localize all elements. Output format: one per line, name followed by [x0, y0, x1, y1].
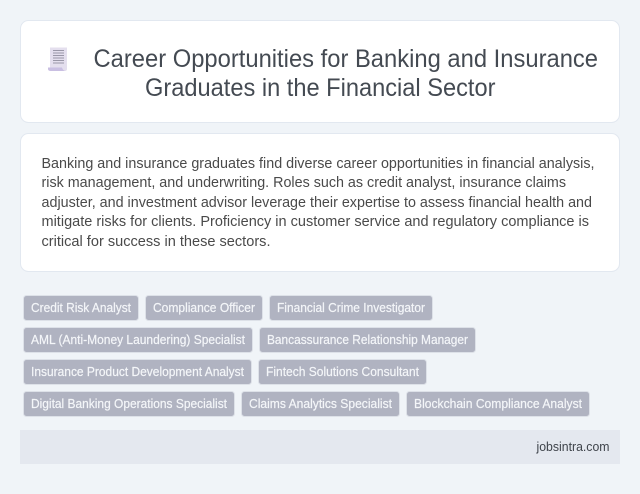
tag: Blockchain Compliance Analyst: Blockchain Compliance Analyst [414, 397, 583, 411]
footer site name: jobsintra.com [536, 440, 610, 454]
tag: Fintech Solutions Consultant: Fintech Solutions Consultant [266, 365, 420, 379]
footer [20, 430, 620, 464]
description line 5: critical for success in these sectors. [42, 234, 270, 250]
tag: Fintech Solutions Consultant [258, 360, 426, 384]
tag: Financial Crime Investigator: Financial Crime Investigator [277, 301, 425, 315]
title line 1: Career Opportunities for Banking and Insurance [94, 45, 598, 73]
tag: Digital Banking Operations Specialist: Digital Banking Operations Specialist [31, 397, 228, 411]
tag: Blockchain Compliance Analyst [406, 392, 590, 416]
tag: AML Specialist [24, 328, 252, 352]
description line 1: Banking and insurance graduates find diverse career opportunities in financial analysis, [42, 156, 594, 172]
tag: Financial Crime Investigator [270, 296, 432, 320]
icon: document scroll [48, 48, 67, 71]
tag: Compliance Officer: Compliance Officer [153, 301, 255, 315]
tag: Compliance Officer [146, 296, 262, 320]
tag: Bancassurance Relationship Manager [260, 328, 476, 352]
tag: Bancassurance Relationship Manager: Bancassurance Relationship Manager [267, 333, 468, 347]
tag: Claims Analytics Specialist [242, 392, 400, 416]
title line 2: Graduates in the Financial Sector [145, 74, 496, 102]
panel: description [20, 134, 620, 272]
panel: title [20, 20, 620, 122]
tag: Insurance Product Development Analyst: Insurance Product Development Analyst [31, 365, 244, 379]
tag: Insurance Product Development Analyst [24, 360, 252, 384]
tag: Digital Banking Operations Specialist [24, 392, 234, 416]
tag: Credit Risk Analyst [24, 296, 138, 320]
description line 4: mitigate risks for clients. Proficiency in customer service and regulatory compliance is [42, 214, 589, 230]
tag group [24, 296, 590, 416]
tag: Claims Analytics Specialist: Claims Analytics Specialist [249, 397, 393, 411]
description line 3: adjuster, and investment advisor leverage their expertise to assess financial health and [42, 195, 592, 211]
tag: Credit Risk Analyst: Credit Risk Analyst [31, 301, 131, 315]
description line 2: risk management, and underwriting. Roles such as credit analyst, insurance claims [42, 175, 566, 191]
tag: AML Specialist: AML (Anti-Money Laundering) Specialist [31, 333, 245, 347]
